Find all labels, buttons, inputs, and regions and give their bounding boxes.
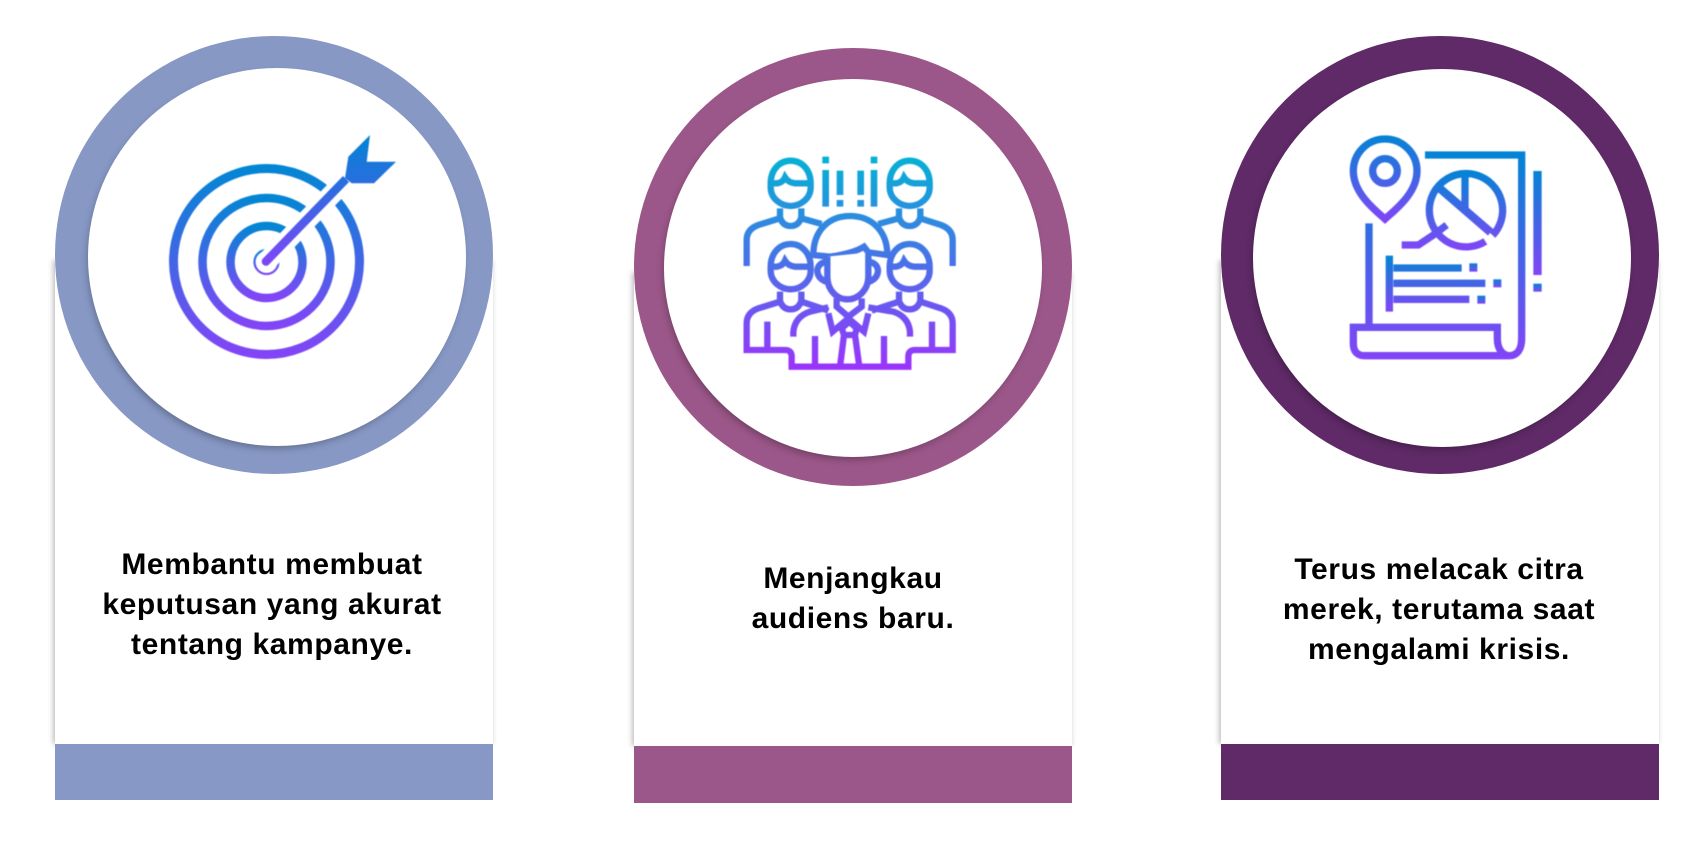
text: card 2: Menjangkau <box>763 562 943 595</box>
text: card 3: mengalami krisis. <box>1308 633 1570 666</box>
panel: card 2 body <box>634 272 1072 746</box>
panel: card 1 body <box>55 260 493 744</box>
bar: card 1 <box>55 744 493 800</box>
icon: audience group <box>742 156 957 371</box>
text: card 3 <box>1283 553 1595 666</box>
card 1: campaign decisions <box>50 36 495 800</box>
text: card 2 <box>752 562 954 635</box>
ring: card 3 <box>1221 36 1659 474</box>
text: card 1: Membantu membuat <box>121 548 423 581</box>
icon: report document with pin and pie chart <box>1348 134 1542 360</box>
text: card 2: audiens baru. <box>752 602 954 635</box>
card 2: new audiences <box>629 48 1074 803</box>
ring: card 2 <box>634 48 1072 486</box>
bar: card 2 <box>634 746 1072 803</box>
icon: target with arrow <box>168 134 396 360</box>
text: card 1: keputusan yang akurat <box>102 588 442 621</box>
panel: card 3 body <box>1221 260 1659 744</box>
bar: card 3 <box>1221 744 1659 800</box>
text: card 3: merek, terutama saat <box>1283 593 1595 626</box>
card 3: brand tracking <box>1216 36 1661 800</box>
text: card 3: Terus melacak citra <box>1294 553 1584 586</box>
text: card 1: tentang kampanye. <box>131 628 413 661</box>
ring: card 1 <box>55 36 493 474</box>
text: card 1 <box>102 548 442 661</box>
